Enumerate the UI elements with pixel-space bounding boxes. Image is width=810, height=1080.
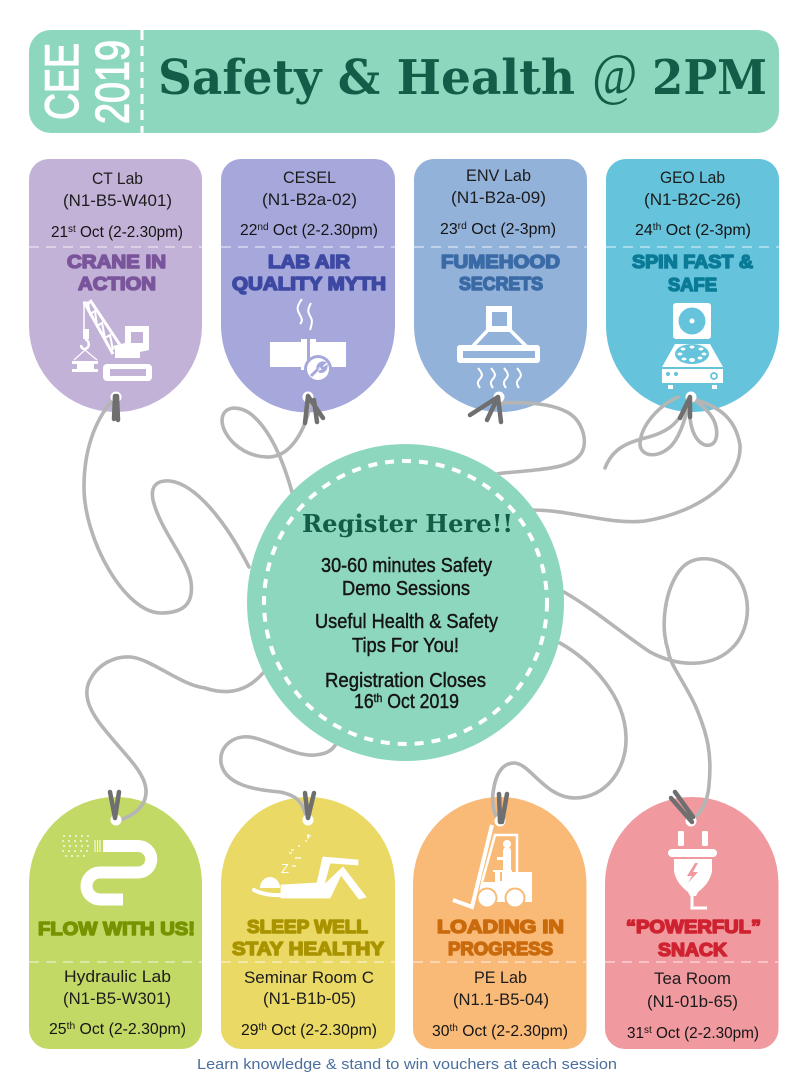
string: loading tag to centre (493, 643, 626, 826)
panel: crane in action: st (68, 224, 76, 235)
panel: sleep well stay healthy: STAY HEALTHY (232, 938, 385, 959)
text: session details: 30-60 minutes Safety (321, 554, 493, 577)
string: flow tag to centre (87, 657, 263, 826)
panel: loading in progress: PE Lab (474, 968, 527, 987)
panel: powerful snack: Oct (2-2.30pm) (652, 1025, 759, 1042)
string: powerful tag to centre (564, 559, 747, 826)
text: session details (315, 554, 499, 713)
panel: lab air quality myth (221, 159, 395, 412)
panel: loading in progress: th (449, 1023, 458, 1034)
panel: spin fast and safe: SAFE (668, 274, 717, 295)
panel: flow with us: FLOW WITH US! (38, 918, 195, 939)
icon: leaking pipe (270, 299, 346, 383)
icon: electric plug (668, 831, 717, 908)
panel: flow with us: (N1-B5-W301) (63, 989, 171, 1008)
panel: lab air quality myth: LAB AIR (268, 251, 350, 272)
panel: fumehood secrets: (N1-B2a-09) (451, 188, 546, 207)
icon: centrifuge (662, 303, 723, 389)
panel: lab air quality myth: QUALITY MYTH (232, 273, 386, 294)
panel: crane in action: CT Lab (92, 169, 143, 188)
text: session details: Tips For You! (352, 634, 459, 657)
panel: fumehood secrets: ENV Lab (466, 166, 531, 185)
heading: register here: Register Here!! (302, 509, 513, 538)
panel: flow with us: Hydraulic Lab (64, 967, 171, 986)
panel: loading in progress: (N1.1-B5-04) (453, 990, 549, 1009)
panel: sleep well stay healthy (221, 797, 395, 1049)
panel: crane in action: ACTION (78, 273, 156, 294)
panel: crane in action: CRANE IN (67, 251, 166, 272)
panel: sleep well stay healthy: SLEEP WELL (247, 916, 368, 937)
title banner: @ (592, 42, 637, 107)
icon: person sleeping (254, 834, 366, 899)
icon: fume hood (457, 306, 540, 388)
title banner: CEE (35, 43, 88, 120)
panel: flow with us (29, 797, 202, 1049)
panel: loading in progress: Oct (2-2.30pm) (458, 1023, 568, 1040)
string: spin tag loops to centre (533, 392, 740, 522)
text: session details: Useful Health & Safety (315, 610, 499, 633)
title banner: 2019 (86, 40, 138, 124)
text: session details: th (374, 691, 382, 705)
text: session details: Demo Sessions (342, 577, 470, 600)
panel: flow with us: th (67, 1021, 75, 1032)
panel: powerful snack: Tea Room (654, 969, 731, 988)
footer note: Learn knowledge & stand to win vouchers at each session (197, 1056, 617, 1073)
panel: powerful snack (605, 797, 778, 1049)
panel: fumehood secrets: SECRETS (459, 273, 543, 294)
text: session details: Oct 2019 (382, 690, 459, 713)
panel: flow with us: 25 (49, 1021, 66, 1038)
panel: crane in action: 21 (51, 224, 68, 241)
panel: lab air quality myth: CESEL (283, 168, 336, 187)
panel: crane in action (29, 159, 202, 412)
panel: sleep well stay healthy: Seminar Room C (244, 968, 374, 987)
panel: loading in progress: 30 (432, 1023, 449, 1040)
panel: sleep well stay healthy: Oct (2-2.30pm) (267, 1022, 377, 1039)
icon: crane (72, 300, 152, 381)
string: sleep tag to centre (221, 737, 336, 826)
panel: spin fast and safe: GEO Lab (660, 168, 725, 187)
icon: forklift (453, 825, 532, 908)
panel: lab air quality myth: (N1-B2a-02) (262, 190, 357, 209)
panel: fumehood secrets: rd (458, 221, 467, 232)
panel: lab air quality myth: Oct (2-2.30pm) (269, 222, 378, 239)
panel: fumehood secrets (414, 159, 587, 412)
panel: powerful snack: SNACK (658, 939, 728, 960)
panel: crane in action: Oct (2-2.30pm) (76, 224, 183, 241)
panel: spin fast and safe: SPIN FAST & (632, 251, 753, 272)
panel: spin fast and safe: 24 (635, 222, 652, 239)
panel: lab air quality myth: 22 (240, 222, 257, 239)
panel: powerful snack: “POWERFUL” (626, 916, 761, 937)
panel: sleep well stay healthy: th (258, 1022, 267, 1033)
panel: spin fast and safe: th (653, 222, 661, 233)
panel: loading in progress: PROGRESS (448, 938, 553, 959)
text: session details: Registration Closes (325, 669, 486, 692)
text: session details: 16 (354, 690, 377, 713)
title banner: Safety & Health (158, 50, 575, 106)
title banner (29, 30, 779, 133)
string: fumehood tag to centre (470, 392, 584, 474)
panel: powerful snack: st (644, 1025, 652, 1036)
panel: fumehood secrets: FUMEHOOD (441, 251, 560, 272)
string: crane tag to centre (84, 392, 249, 613)
central circle: register here (247, 444, 564, 761)
panel: powerful snack: (N1-01b-65) (647, 992, 738, 1011)
panel: fumehood secrets: Oct (2-3pm) (467, 221, 556, 238)
icon: person sleeping: Z (281, 861, 289, 876)
panel: loading in progress (413, 797, 586, 1049)
panel: spin fast and safe (606, 159, 779, 412)
string: lab air tag to centre (222, 392, 323, 492)
panel: sleep well stay healthy: 29 (241, 1022, 258, 1039)
icon: water hose (62, 836, 151, 900)
panel: fumehood secrets: 23 (440, 221, 457, 238)
title banner: 2PM (652, 50, 767, 106)
panel: loading in progress: LOADING IN (437, 916, 564, 937)
panel: spin fast and safe: (N1-B2C-26) (644, 190, 741, 209)
panel: spin fast and safe: Oct (2-3pm) (661, 222, 751, 239)
panel: crane in action: (N1-B5-W401) (63, 191, 172, 210)
panel: sleep well stay healthy: (N1-B1b-05) (263, 989, 356, 1008)
panel: flow with us: Oct (2-2.30pm) (75, 1021, 186, 1038)
panel: powerful snack: 31 (627, 1025, 644, 1042)
panel: lab air quality myth: nd (257, 222, 269, 233)
